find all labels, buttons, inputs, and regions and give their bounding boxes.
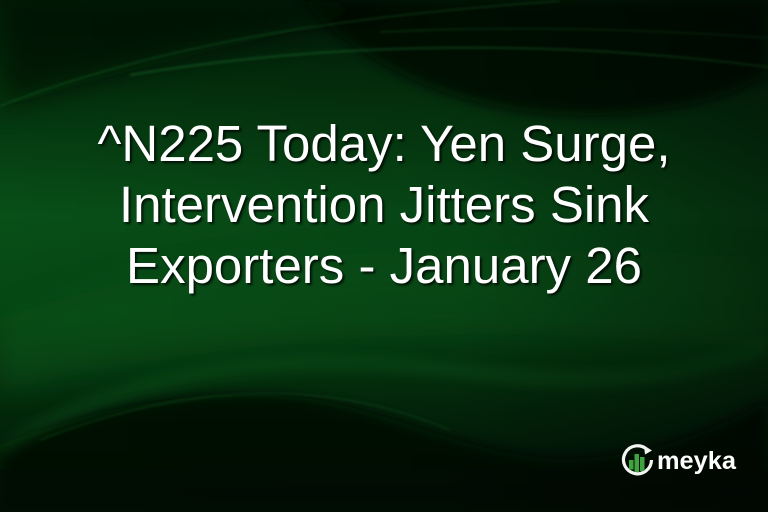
title: Exporters - January 26 (126, 237, 642, 294)
title: Intervention Jitters Sink (119, 176, 649, 233)
wordmark: meyka (657, 447, 737, 475)
title (97, 115, 671, 296)
icon: ring with bars (624, 446, 652, 474)
title: ^N225 Today: Yen Surge, (97, 115, 671, 172)
logo: meyka (622, 444, 737, 476)
